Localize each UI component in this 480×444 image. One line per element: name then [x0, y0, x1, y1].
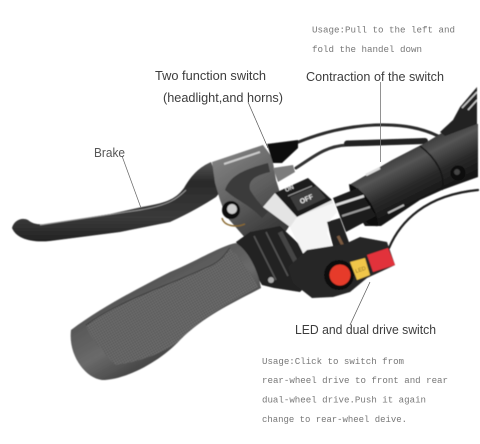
- label: contraction of the switch: Contraction of the switch: [306, 69, 444, 84]
- handlebar photo: [12, 87, 478, 380]
- usage note: contraction switch: [312, 24, 455, 55]
- label: brake: Brake: [94, 145, 125, 160]
- usage note: drive switch: dual-wheel drive.Push it again: [262, 394, 426, 406]
- usage note: drive switch: [262, 356, 448, 425]
- usage note: drive switch: Usage:Click to switch from: [262, 356, 404, 367]
- clamp: [327, 218, 350, 252]
- label: LED and dual drive switch: LED and dual drive switch: [295, 322, 436, 337]
- leader line: contraction of the switch: [380, 82, 382, 162]
- leader line: brake: [122, 156, 141, 208]
- leader line: two function switch: [248, 102, 268, 148]
- mirror mount: [440, 87, 477, 136]
- label: two function switch: [155, 68, 283, 105]
- lever housing: [212, 145, 290, 240]
- button block: LED: [355, 266, 367, 275]
- usage note: contraction switch: fold the handel down: [312, 44, 422, 55]
- cables: [296, 125, 478, 248]
- usage note: drive switch: change to rear-wheel deive.: [262, 414, 407, 425]
- switch housing: [263, 193, 337, 257]
- on off switch: OFF: [299, 193, 315, 206]
- usage note: contraction switch: Usage:Pull to the left and: [312, 24, 455, 36]
- usage note: drive switch: rear-wheel drive to front and rear: [262, 375, 448, 386]
- label: two function switch: (headlight,and horns): [163, 90, 283, 105]
- label: two function switch: Two function switch: [155, 68, 266, 83]
- bolt: [222, 201, 245, 226]
- grip collar: [236, 226, 312, 292]
- button block: [288, 237, 395, 298]
- on off switch: [275, 178, 332, 217]
- handlebar tube: [333, 123, 478, 232]
- connector: [267, 140, 298, 163]
- brake lever: [12, 162, 222, 241]
- on off switch: ON: [284, 185, 295, 194]
- leader line: LED switch: [350, 282, 370, 325]
- grip: [71, 243, 274, 380]
